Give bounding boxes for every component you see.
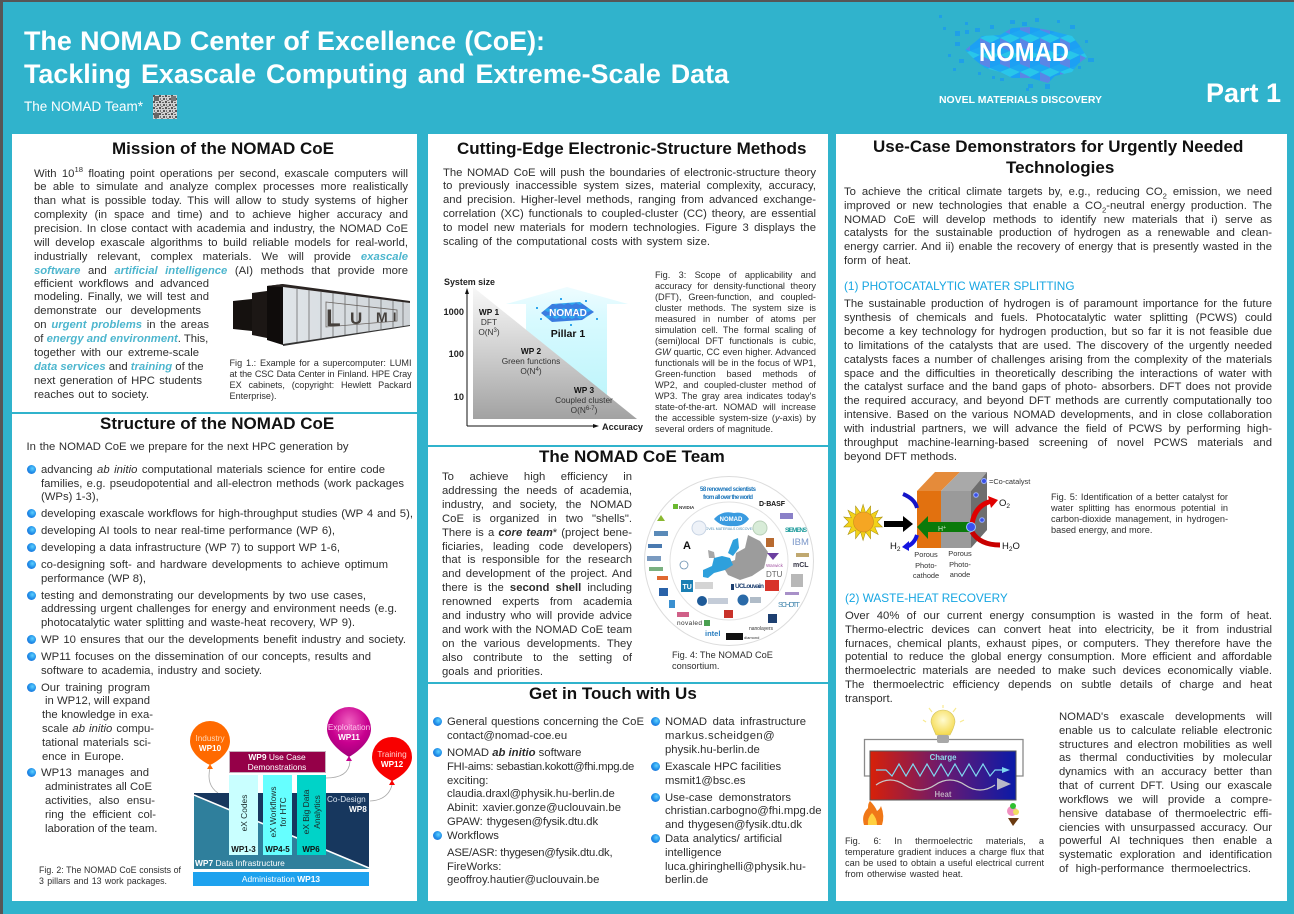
list: contacts left: NOMAD ab initio software: [447, 747, 581, 759]
text block: use-case intro: improved or new technologies that enable a CO2-neutral energy production. The: [844, 200, 1272, 214]
chart: system size versus accuracy: [444, 277, 644, 432]
balloon: industry: [190, 721, 230, 769]
diagram: photocatalytic cell: 2: [1006, 503, 1010, 510]
list: work packages: developing a data infrastructure (WP 7) to support WP 1-6,: [41, 542, 340, 554]
list: contacts left: Workflows: [447, 830, 499, 842]
text block: team: ficiaries, leading code developers): [442, 541, 632, 553]
caption: figure 1: Enterprise).: [230, 390, 277, 400]
text block: use-case intro: energy carrier. And ii) enable the recovery of energy that is presently wasted in the: [844, 241, 1272, 253]
chart: system size versus accuracy: NOMAD: [549, 308, 587, 319]
author line: The NOMAD Team*: [24, 99, 143, 114]
text block: mission continued: data services and training of the: [34, 361, 204, 373]
diagram: photocatalytic cell: H: [938, 526, 943, 533]
diagram: consortium circle: NOMAD: [720, 517, 743, 523]
list: work packages: Our training program: [41, 682, 150, 694]
diagram: consortium circle: [644, 476, 814, 646]
text block: team: addressing the needs of academia,: [442, 485, 632, 497]
text block: exascale thermoelectrics: hensive database of thermoelectric effi-: [1059, 808, 1272, 820]
panel: contact: [428, 684, 828, 901]
text block: methods: The NOMAD CoE will push the boundaries of electronic-structure theory: [443, 166, 816, 178]
diagram: photocatalytic cell: O: [999, 498, 1006, 509]
image: LUMI supercomputer: [233, 284, 410, 346]
text block: methods: scaling of the computational costs with system size.: [443, 236, 710, 248]
diagram: pillars and work packages: Analytics: [312, 795, 322, 829]
caption: figure 3: Fig. 3: Scope of applicability and: [655, 270, 816, 280]
list: contacts left: geoffroy.hautier@uclouvain.be: [447, 874, 599, 886]
text block: use-case intro: NOMAD CoE will develop methods to identify new materials that i) serve as: [844, 214, 1272, 226]
diagram: pillars and work packages: eX Big Data: [301, 789, 311, 834]
text block: waste heat: transport.: [845, 693, 893, 705]
list: work packages: in WP12, will expand: [45, 695, 150, 707]
text block: exascale thermoelectrics: enable us to calculate reliable electronic: [1059, 725, 1272, 737]
text block: mission intro: than what is possible today. This will allow to study systems of higher: [34, 195, 408, 207]
diagram: consortium circle: IBM: [792, 537, 809, 548]
balloon: exploitation: Exploitation: [328, 723, 371, 732]
diagram: pillars and work packages: WP9 Use Case: [248, 752, 306, 762]
caption: figure 6: can be used to obtain a useful electrical current: [845, 858, 1044, 868]
text block: water splitting: to limitations of the catalysts that are used. The discovery of the urgently needed: [844, 340, 1272, 352]
caption: figure 3: accuracy for density-functional theory: [655, 280, 816, 290]
text block: water splitting: become a key technology for hydrogen production, but so far it is not feasible due: [844, 326, 1272, 338]
text block: water splitting: space and the difficulties in theoretically describing the interactions of water with: [844, 368, 1272, 380]
list: work packages: addressing urgent challenges for energy and environment needs (e.g.: [41, 603, 397, 615]
text block: water splitting: the catalyst surface and the band gaps of photo- absorbers. DFT does not provide: [844, 381, 1272, 393]
list: contacts left: Abinit: xavier.gonze@uclouvain.be: [447, 802, 621, 814]
text block: exascale thermoelectrics: as thermal conductivities by molecular: [1059, 752, 1272, 764]
text block: team: [442, 471, 632, 678]
diagram: pillars and work packages: Co-Design: [327, 795, 366, 804]
subheading: water splitting: (1) PHOTOCATALYTIC WATER SPLITTING: [844, 279, 1074, 293]
panel: mission: [12, 134, 417, 412]
caption: figure 3: GW quartic, CC even higher. Advanced: [655, 346, 816, 356]
text block: methods: to model new materials for modern technologies. Figure 3 displays the: [443, 222, 816, 234]
text block: team: industry, and society, the NOMAD: [442, 499, 632, 511]
diagram: consortium circle: mCL: [793, 562, 809, 569]
caption: figure 4: consortium.: [672, 660, 720, 670]
caption: figure 3: cluster methods. The system size is: [655, 302, 816, 312]
list: work packages: co-designing soft- and hardware developments to achieve optimum: [41, 559, 388, 571]
text block: team: To achieve high efficiency in: [442, 471, 632, 483]
diagram: pillars and work packages: Demonstrations: [248, 762, 306, 772]
text block: mission continued: modeling. Finally, we will test and: [34, 291, 209, 303]
text block: mission continued: on urgent problems in the areas: [34, 319, 209, 331]
diagram: photocatalytic cell: [843, 472, 1030, 578]
icon: QR code: [153, 95, 177, 119]
balloon: exploitation: WP11: [338, 733, 360, 742]
part label: Part 1: [1206, 78, 1281, 108]
caption: figure 3: (semi)local DFT functionals is cubic,: [655, 336, 816, 346]
chart: system size versus accuracy: 4: [536, 367, 540, 373]
list: work packages: developing AI tools to near real-time performance (WP 6),: [41, 525, 335, 537]
list: work packages: activities, also ensu-: [45, 795, 155, 807]
list: work packages: laboration of the team.: [45, 823, 157, 835]
list: contacts left: ASE/ASR: thygesen@fysik.dtu.dk,: [447, 847, 612, 859]
caption: figure 2: 3 pillars and 13 work packages.: [39, 876, 167, 886]
text block: water splitting: intensive. Based on the various NOMAD developments, and in close collaboration: [844, 409, 1272, 421]
caption: figure 5: water splitting has enormous potential in: [1051, 502, 1228, 512]
heading: use cases: [873, 137, 1243, 177]
text block: mission intro: With 1018 floating point operations per second, exascale computers will: [34, 165, 408, 180]
title: [24, 26, 730, 89]
caption: figure 6: temperature gradient induces a charge flux that: [845, 846, 1044, 856]
text block: team: there is the second shell including: [442, 582, 632, 594]
caption: figure 2: Fig. 2: The NOMAD CoE consists of: [39, 864, 181, 874]
diagram: pillars and work packages: WP6: [302, 845, 320, 854]
text block: water splitting: throughput machine-learning-based screening of novel PCWS materials and: [844, 437, 1272, 449]
caption: figure 5: carbon-dioxide management, in hydrogen-: [1051, 514, 1228, 524]
list: contacts left: contact@nomad-coe.eu: [447, 730, 567, 742]
text block: exascale thermoelectrics: [1059, 711, 1272, 875]
caption: figure 1: [230, 358, 412, 401]
diagram: pillars and work packages: WP8: [349, 805, 367, 814]
list: contacts left: GPAW: thygesen@fysik.dtu.dk: [447, 816, 598, 828]
diagram: pillars and work packages: WP7 Data Infrastructure: [195, 858, 285, 868]
chart: system size versus accuracy: Coupled cluster: [555, 395, 613, 405]
chart: system size versus accuracy: ): [539, 366, 542, 376]
diagram: photocatalytic cell: Photo-: [915, 561, 937, 570]
caption: figure 3: measured in number of atoms per: [655, 314, 816, 324]
panel: team: [428, 447, 828, 682]
list: work packages: developing exascale workflows for high-throughput studies (WP 4 and 5),: [41, 508, 413, 520]
caption: figure 4: Fig. 4: The NOMAD CoE: [672, 650, 773, 660]
text block: mission continued: [34, 278, 209, 400]
text block: exascale thermoelectrics: systematic exploration and identification: [1059, 849, 1272, 861]
diagram: pillars and work packages: WP1-3: [231, 845, 256, 854]
list: work packages: advancing ab initio computational materials science for entire code: [41, 464, 385, 476]
chart: system size versus accuracy: ): [595, 405, 598, 415]
text block: mission intro: will develop exascale algorithms to build reliable models for real-world,: [34, 237, 408, 249]
diagram: pillars and work packages: eX Workflows: [268, 786, 278, 838]
list: contacts right: luca.ghiringhelli@physik.hu-: [665, 861, 806, 873]
caption: figure 6: Fig. 6: In thermoelectric materials, a: [845, 836, 1044, 846]
list: contacts right: physik.hu-berlin.de: [665, 744, 760, 756]
text block: mission continued: of energy and environment. This,: [34, 333, 208, 345]
header banner: [24, 15, 1281, 119]
text block: waste heat: Thermo-electric devices can convert heat into electricity, be it from industrial: [845, 624, 1272, 636]
text block: water splitting: synthesis of chemicals and fuels. Photocatalytic water splitting (PCWS) could: [844, 312, 1272, 324]
text block: mission intro: complexity (in space and time) and to achieve higher accuracy and: [34, 209, 408, 221]
text block: mission continued: next generation of HPC students: [34, 375, 202, 387]
caption: figure 3: state-of-the-art. NOMAD will increase: [655, 402, 816, 412]
text block: water splitting: catalysts faces a number of challenges arising from the complexity of the materials: [844, 354, 1272, 366]
list: work packages: WP13 manages and: [41, 767, 149, 779]
list: contacts right: Use-case demonstrators: [665, 792, 791, 804]
caption: figure 3: simulation cell. The formal scaling of: [655, 324, 816, 334]
list: contacts right: berlin.de: [665, 874, 708, 886]
caption: figure 1: at the CSC Data Center in Finland. HPE Cray: [230, 368, 412, 378]
diagram: consortium circle: TU: [682, 584, 692, 591]
chart: system size versus accuracy: 10: [454, 392, 464, 402]
text block: team: goals and priorities.: [442, 666, 543, 678]
text block: use-case intro: [844, 186, 1272, 267]
list: work packages: software to academia, industry and society.: [41, 665, 262, 677]
heading: structure: Structure of the NOMAD CoE: [100, 414, 334, 433]
text block: waste heat: [845, 610, 1272, 705]
caption: figure 5: [1051, 492, 1228, 535]
text block: water splitting: with industrial partners, we will advance the field of PCWS by performing high-: [844, 423, 1272, 435]
chart: system size versus accuracy: ): [497, 327, 500, 337]
panel: use-case demonstrators: [836, 134, 1287, 901]
caption: figure 1: Fig 1.: Example for a supercomputer: LUMI: [230, 358, 412, 368]
balloon: training: WP12: [381, 760, 404, 769]
diagram: pillars and work packages: WP4-5: [265, 845, 290, 854]
diagram: photocatalytic cell: O: [1012, 541, 1020, 552]
diagram: consortium circle: A: [683, 540, 691, 552]
list: work packages: [27, 464, 413, 835]
list: contacts left: [433, 716, 644, 886]
text block: mission continued: efficient workflows and advanced: [34, 278, 209, 290]
diagram: consortium circle: NOVEL MATERIALS DISCOVERY: [703, 527, 758, 531]
chart: system size versus accuracy: O(N: [520, 366, 536, 376]
text block: mission continued: together with our extreme-scale: [34, 347, 199, 359]
text block: team: and industry who will provide advice: [442, 610, 632, 622]
text block: team: CoE is organized in two "shells".: [442, 513, 632, 525]
diagram: photocatalytic cell: H: [1002, 541, 1009, 552]
list: work packages: the knowledge in exa-: [42, 709, 153, 721]
text block: methods: correlation (XC) functionals to coupled-cluster (CC) theory, are essential: [443, 208, 816, 220]
list: contacts right: and thygesen@fysik.dtu.dk: [665, 819, 802, 831]
diagram: photocatalytic cell: Photo-: [949, 560, 971, 569]
list: contacts right: intelligence: [665, 847, 722, 859]
text block: waste heat: Over 40% of our current energy consumption is wasted in the form of heat.: [845, 610, 1272, 622]
text block: mission intro: precision. In close contact with academia and industry, the NOMAD CoE: [34, 223, 408, 235]
diagram: pillars and work packages: [190, 707, 412, 886]
title: The NOMAD Center of Excellence (CoE):: [24, 26, 545, 56]
text block: mission intro: be able to simulate and analyze complex processes more realistically: [34, 181, 408, 193]
text block: methods: and precision. Higher-level methods, ranging from advanced exchange-: [443, 194, 816, 206]
diagram: consortium circle: DTU: [766, 570, 783, 579]
list: contacts left: exciting:: [447, 775, 488, 787]
logo: NOMAD novel materials discovery: NOMAD: [979, 37, 1069, 67]
text block: water splitting: beyond DFT methods.: [844, 451, 957, 463]
caption: figure 3: functionals will be in the focus of WP1,: [655, 358, 816, 368]
panel: electronic-structure methods: [428, 134, 828, 445]
text block: team: that is responsible for the research: [442, 554, 632, 566]
text block: exascale thermoelectrics: workflows we will provide a compre-: [1059, 794, 1272, 806]
text block: structure intro: In the NOMAD CoE we prepare for the next HPC generation by: [26, 441, 348, 453]
list: contacts right: Exascale HPC facilities: [665, 761, 781, 773]
heading: team: The NOMAD CoE Team: [539, 447, 725, 466]
image: LUMI supercomputer: U: [350, 309, 362, 328]
text block: waste heat: potential to reduce the global energy consumption. More efficient and affordable: [845, 651, 1272, 663]
diagram: consortium circle: Warwick: [766, 563, 784, 568]
diagram: consortium circle: NVIDIA: [679, 505, 695, 510]
chart: system size versus accuracy: O(N: [478, 327, 494, 337]
diagram: pillars and work packages: Administration WP13: [242, 874, 320, 884]
caption: figure 3: WP2, and coupled-cluster method of: [655, 380, 816, 390]
text block: team: renowned experts from academia: [442, 596, 632, 608]
diagram: consortium circle: D·BASF: [759, 501, 786, 508]
balloon: industry: Industry: [195, 734, 225, 743]
text block: mission continued: reaches out to society.: [34, 388, 149, 400]
text block: methods: to previously inaccessible system sizes, material complexity, accuracy,: [443, 180, 816, 192]
list: work packages: WP11 focuses on the dissemination of our concepts, results and: [41, 651, 371, 663]
list: work packages: WP 10 ensures that our the developments benefit industry and society.: [41, 634, 406, 646]
panel: structure: [12, 414, 417, 901]
balloon: industry: WP10: [199, 744, 222, 753]
list: work packages: families, e.g. pseudopotential and all-electron methods (work packages: [41, 478, 404, 490]
balloon: training: Training: [377, 750, 407, 759]
list: work packages: ence in Europe.: [42, 751, 124, 763]
list: work packages: administrates all CoE: [45, 781, 152, 793]
caption: figure 6: [845, 836, 1044, 878]
chart: system size versus accuracy: WP 1: [479, 307, 499, 317]
image: LUMI supercomputer: L: [326, 305, 341, 332]
caption: figure 5: Fig. 5: Identification of a better catalyst for: [1051, 492, 1228, 502]
caption: figure 3: the accessible system-size (y-axis) by: [655, 412, 816, 422]
balloon: exploitation: [327, 707, 371, 761]
diagram: consortium circle: from all over the world: [703, 495, 753, 501]
diagram: photocatalytic cell: Porous: [948, 549, 972, 558]
list: contacts right: christian.carbogno@fhi.mpg.de: [665, 805, 822, 817]
text block: water splitting: [844, 298, 1272, 463]
caption: figure 3: (DFT), Green-function, and coupled-: [655, 292, 816, 302]
diagram: pillars and work packages: for HTC: [278, 797, 288, 827]
text block: team: on the various developments. They: [442, 638, 632, 650]
text block: use-case intro: To achieve the critical climate targets by, e.g., reducing CO2 emission, we need: [844, 186, 1272, 200]
subheading: waste heat: (2) WASTE-HEAT RECOVERY: [845, 591, 1008, 605]
chart: system size versus accuracy: 1000: [444, 307, 464, 317]
text block: waste heat: The thermoelectric efficiency depends on subtle details of charge and heat: [845, 679, 1272, 691]
list: work packages: ring the efficient col-: [45, 809, 156, 821]
balloon: training: [372, 737, 412, 785]
diagram: consortium circle: SCHOTT: [778, 600, 800, 609]
diagram: thermoelectric device: Charge: [930, 753, 957, 762]
diagram: photocatalytic cell: +: [943, 525, 946, 531]
list: contacts right: Data analytics/ artificial: [665, 833, 782, 845]
text block: mission intro: software and artificial intelligence (AI) methods that provide more: [34, 265, 408, 277]
chart: system size versus accuracy: O(N: [571, 405, 586, 415]
diagram: pillars and work packages: eX Codes: [239, 795, 249, 831]
image: LUMI supercomputer: M: [376, 309, 388, 325]
text block: team: There is a core team* (project bene-: [442, 527, 632, 539]
diagram: photocatalytic cell: 2: [1009, 546, 1013, 553]
diagram: thermoelectric device: Heat: [935, 790, 952, 799]
diagram: thermoelectric device: [863, 705, 1024, 826]
list: contacts right: msmit1@bsc.es: [665, 775, 746, 787]
diagram: photocatalytic cell: H: [890, 541, 897, 552]
list: contacts right: markus.scheidgen@: [665, 730, 775, 742]
caption: figure 3: Green-function based methods of: [655, 368, 816, 378]
title: Tackling Exascale Computing and Extreme-Scale Data: [24, 59, 729, 89]
list: contacts left: FHI-aims: sebastian.kokott@fhi.mpg.de: [447, 761, 634, 773]
chart: system size versus accuracy: WP 3: [574, 385, 594, 395]
chart: system size versus accuracy: 100: [449, 349, 464, 359]
text block: water splitting: The sustainable production of hydrogen is of paramount importance for the future: [844, 298, 1272, 310]
diagram: photocatalytic cell: =Co-catalyst: [989, 477, 1030, 486]
caption: figure 6: from otherwise wasted heat.: [845, 868, 963, 878]
text block: use-case intro: form of heat.: [844, 255, 911, 267]
heading: contact: Get in Touch with Us: [529, 684, 697, 703]
list: contacts right: NOMAD data infrastructure: [665, 716, 806, 728]
diagram: consortium circle: nanolayers: [749, 626, 774, 632]
chart: system size versus accuracy: 6-7: [586, 406, 595, 412]
caption: figure 3: [655, 270, 816, 434]
list: contacts left: General questions concerning the CoE: [447, 716, 644, 728]
heading: methods: Cutting-Edge Electronic-Structure Methods: [457, 139, 806, 158]
diagram: photocatalytic cell: Porous: [914, 550, 938, 559]
chart: system size versus accuracy: WP 2: [521, 346, 541, 356]
list: work packages: tational materials sci-: [42, 737, 151, 749]
text block: exascale thermoelectrics: ciencies with unsurpassed accuracy. Our: [1059, 822, 1272, 834]
list: contacts left: claudia.draxl@physik.hu-berlin.de: [447, 788, 615, 800]
logo: NOMAD novel materials discovery: [939, 15, 1102, 106]
text block: team: also contribute to the setting of: [442, 652, 632, 664]
diagram: consortium circle: intel: [705, 629, 720, 638]
text block: waste heat: furnaces, chemical plants, exhaust pipes, or computers. They therefore have the: [845, 638, 1272, 650]
list: work packages: (WPs) 1-3),: [41, 491, 99, 503]
text block: team: and development of the project. And: [442, 568, 632, 580]
text block: exascale thermoelectrics: dynamics with an accuracy better than: [1059, 766, 1272, 778]
text block: team: and work with the NOMAD CoE team: [442, 624, 632, 636]
text block: methods: [443, 166, 816, 248]
logo: NOMAD novel materials discovery: NOVEL MATERIALS DISCOVERY: [939, 94, 1102, 106]
text block: water splitting: the required accuracy, and beyond DFT methods are currently computationally too: [844, 395, 1272, 407]
text block: exascale thermoelectrics: NOMAD's exascale developments will: [1059, 711, 1272, 723]
list: work packages: testing and demonstrating our developments by two use cases,: [41, 590, 366, 602]
diagram: photocatalytic cell: 2: [897, 546, 901, 553]
text block: exascale thermoelectrics: of high-performance thermoelectrics.: [1059, 863, 1251, 875]
diagram: consortium circle: 58 renowned scientists: [700, 487, 757, 493]
text block: exascale thermoelectrics: that of current DFT. Using our exascale: [1059, 780, 1272, 792]
caption: figure 2: [39, 864, 181, 886]
text block: mission intro: industrially relevant, complex materials. We will provide exascale: [34, 251, 408, 263]
chart: system size versus accuracy: Pillar 1: [551, 328, 585, 340]
caption: figure 3: several orders of magnitude.: [655, 424, 773, 434]
text block: exascale thermoelectrics: powerful AI techniques then enable a: [1059, 835, 1272, 847]
diagram: consortium circle: diamond: [744, 635, 759, 640]
diagram: consortium circle: SIEMENS: [785, 528, 807, 534]
list: work packages: performance (WP 8),: [41, 573, 146, 585]
diagram: consortium circle: novaled: [677, 620, 702, 627]
image: LUMI supercomputer: I: [393, 310, 396, 324]
text block: exascale thermoelectrics: structures and electron mobilities as well: [1059, 739, 1272, 751]
heading: mission: Mission of the NOMAD CoE: [112, 139, 334, 158]
list: work packages: scale ab initio compu-: [42, 723, 154, 735]
caption: figure 1: EX cabinets, (copyright: Hewlett Packard: [230, 380, 412, 390]
list: contacts right: [651, 716, 822, 886]
list: work packages: photocatalytic water splitting and waste-heat recovery, WP 9).: [41, 617, 355, 629]
list: contacts left: FireWorks:: [447, 861, 501, 873]
caption: figure 4: [672, 650, 773, 670]
heading: use cases: Use-Case Demonstrators for Urgently Needed: [873, 137, 1243, 156]
chart: system size versus accuracy: System size: [444, 277, 495, 287]
text block: use-case intro: catalysts for the sustainable production of hydrogen as a renewable and clean-: [844, 227, 1272, 239]
chart: system size versus accuracy: DFT: [481, 317, 497, 327]
caption: figure 5: based energy, and more.: [1051, 524, 1152, 534]
text block: mission continued: demonstrate our developments: [34, 305, 201, 317]
heading: use cases: Technologies: [1006, 158, 1114, 177]
text block: waste heat: thermoelectric materials are needed to make such devices economically viable.: [845, 665, 1272, 677]
text block: mission intro: [34, 165, 408, 277]
diagram: consortium circle: UCLouvain: [735, 583, 764, 590]
chart: system size versus accuracy: Accuracy: [602, 422, 644, 432]
chart: system size versus accuracy: 3: [494, 328, 498, 334]
caption: figure 3: WP3. The gray area indicates today's: [655, 390, 816, 400]
chart: system size versus accuracy: Green functions: [502, 356, 560, 366]
